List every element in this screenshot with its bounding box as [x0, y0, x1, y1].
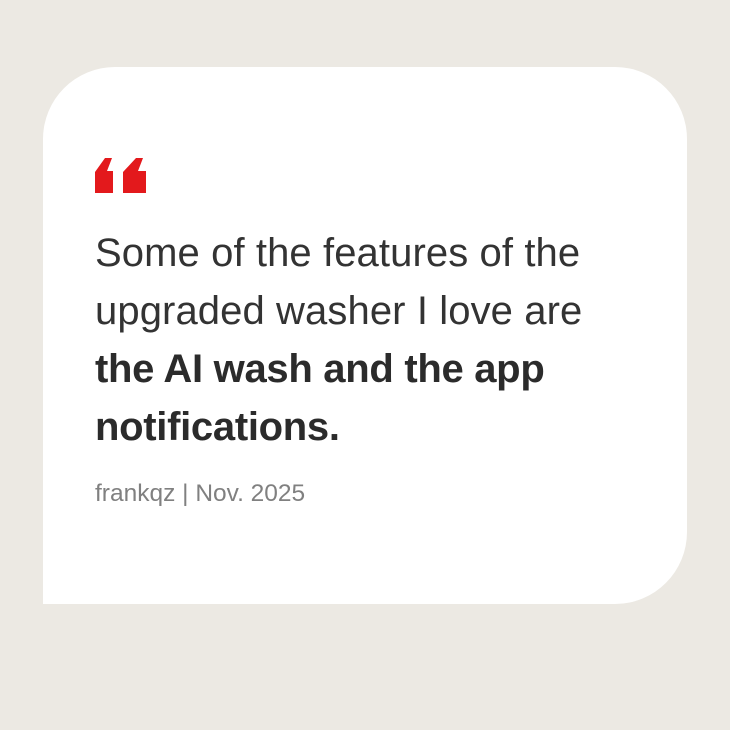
author: frankqz | Nov. 2025	[95, 480, 305, 507]
quote text: notifications.	[95, 405, 340, 449]
quote text	[95, 231, 582, 449]
quote text: upgraded washer I love are	[95, 289, 582, 333]
quote text: the AI wash and the app	[95, 347, 544, 391]
icon: red quote mark	[95, 158, 146, 193]
card panel	[43, 67, 687, 604]
quote text: Some of the features of the	[95, 231, 580, 275]
